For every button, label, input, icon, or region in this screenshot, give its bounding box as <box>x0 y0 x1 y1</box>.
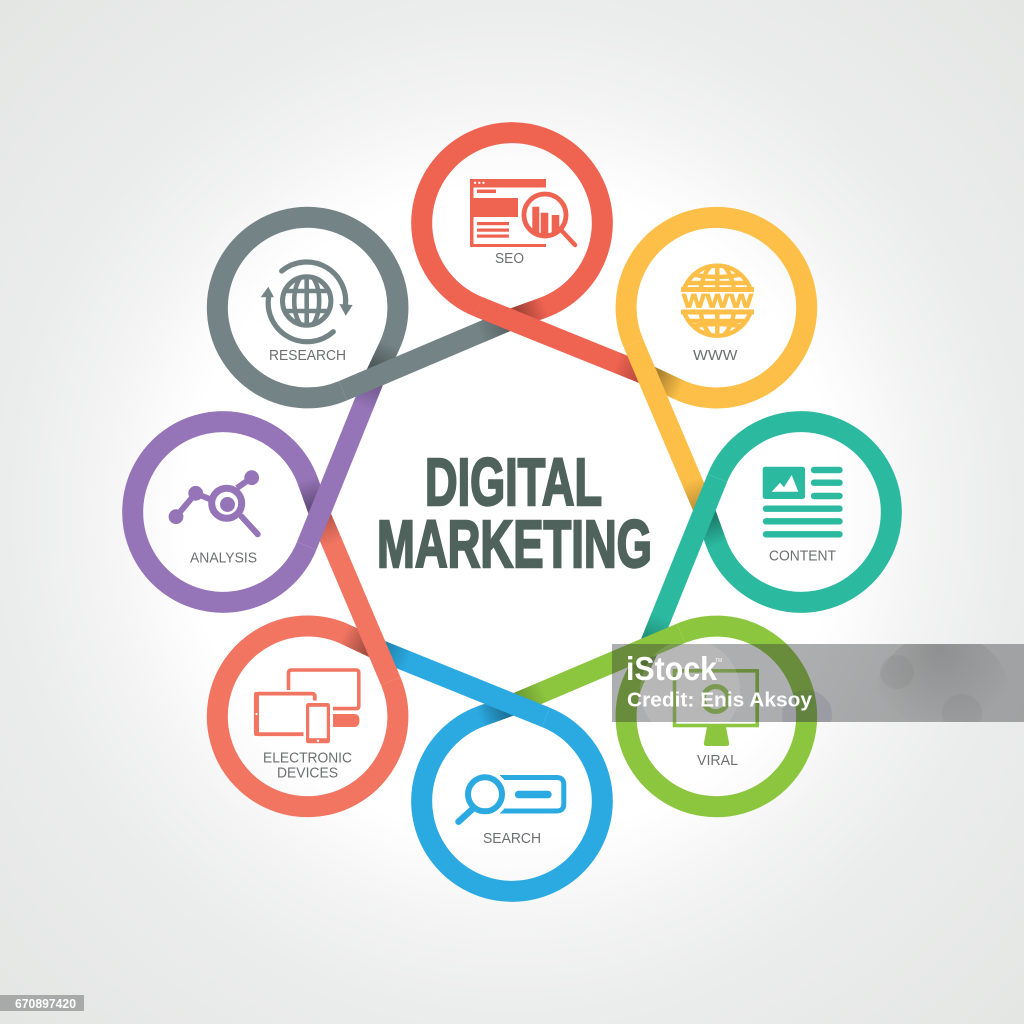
icon: monitor with target <box>674 671 757 746</box>
watermark texture circles <box>640 644 988 722</box>
ribbon network of eight rings <box>133 133 891 891</box>
label: WWW: WWW <box>693 348 738 364</box>
icon: globe with refresh arrows <box>261 262 353 342</box>
ribbon: WWW yellow <box>545 180 877 512</box>
ribbon: analysis purple <box>133 376 376 602</box>
label: ANALYSIS: ANALYSIS <box>190 551 257 567</box>
icon: search field <box>458 770 564 822</box>
image id tag <box>0 995 84 1011</box>
label: CONTENT: CONTENT <box>769 549 836 565</box>
ribbon: viral green <box>512 545 844 877</box>
icon: monitor tablet and phone <box>254 670 360 746</box>
label: SEARCH: SEARCH <box>483 831 541 847</box>
icon: www globe: WWW <box>682 292 753 312</box>
watermark trademark: TM <box>715 658 722 664</box>
node: Content <box>763 467 840 565</box>
label: ELECTRONIC DEVICES: DEVICES <box>277 766 338 782</box>
node: WWW <box>681 264 754 360</box>
icon: browser window with magnifier <box>470 179 575 247</box>
watermark text: iStock: iStock <box>626 650 718 687</box>
ribbon: search blue <box>376 648 602 891</box>
icon: article layout <box>763 467 840 534</box>
image id tag: 670897420 <box>15 997 76 1011</box>
watermark text: credit: Credit: Enis Aksoy <box>627 690 813 712</box>
label: VIRAL: VIRAL <box>697 753 738 769</box>
ribbon: content teal <box>648 422 891 648</box>
node: Search <box>458 770 564 847</box>
icon: connected dots with target magnifier <box>169 470 259 534</box>
title line: DIGITAL: DIGITAL <box>425 445 602 520</box>
title line: MARKETING: MARKETING <box>377 507 652 582</box>
node: Electronic devices <box>254 670 360 782</box>
ribbon: electronic devices salmon <box>147 512 479 844</box>
node: SEO <box>470 179 575 267</box>
node: Research <box>261 262 353 364</box>
node: Viral <box>674 671 757 769</box>
node: Analysis <box>169 470 259 567</box>
label: ELECTRONIC DEVICES <box>263 751 352 782</box>
title <box>377 445 652 582</box>
watermark band <box>612 644 1024 722</box>
label: RESEARCH: RESEARCH <box>269 348 346 364</box>
ribbon: SEO red <box>422 133 648 376</box>
ribbon: research grey <box>180 147 512 479</box>
label: ELECTRONIC DEVICES: ELECTRONIC <box>263 751 352 767</box>
label: SEO: SEO <box>495 251 524 267</box>
red ribbon crossing over the grey ribbon <box>478 307 550 336</box>
